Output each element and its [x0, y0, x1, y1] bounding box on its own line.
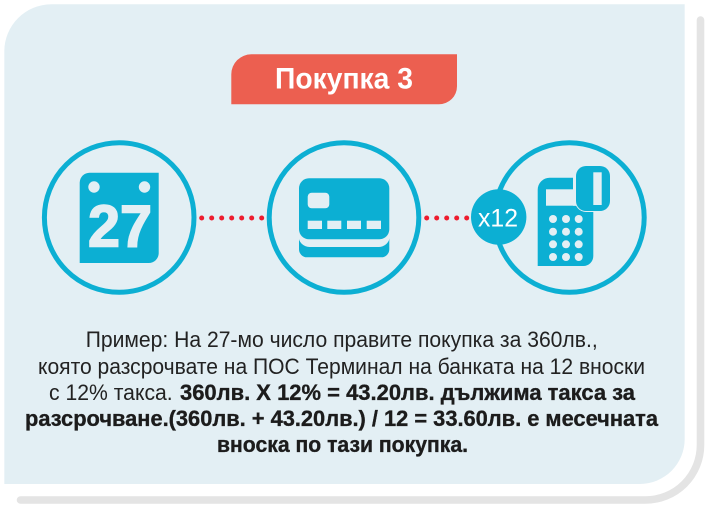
icon: POS terminal in circle — [495, 143, 644, 292]
text block: example explanation: 360лв. X 12% = 43.20лв. дължима такса за — [180, 380, 635, 405]
connector: dotted line card to terminal — [424, 216, 469, 220]
text block: example explanation — [25, 327, 658, 457]
text block: example explanation: Пример: На 27-мо число правите покупка за 360лв., — [86, 327, 598, 352]
icon: credit card in circle — [269, 143, 419, 292]
text block: example explanation: вноска по тази покупка. — [217, 432, 468, 457]
text block: example explanation: която разсрочвате на ПОС Терминал на банката на 12 вноски — [38, 354, 645, 379]
text block: example explanation: разсрочване.(360лв. + 43.20лв.) / 12 = 33.60лв. е месечната — [25, 406, 658, 431]
icon: calendar in circle: 27 — [88, 194, 152, 260]
badge: x12 installments: x12 — [478, 205, 518, 233]
badge: x12 installments — [471, 189, 526, 245]
icon: calendar in circle — [44, 143, 194, 292]
connector: dotted line calendar to card — [199, 216, 264, 220]
heading: Покупка 3 badge: Покупка 3 — [275, 63, 413, 96]
text block: example explanation: с 12% такса. — [49, 380, 173, 405]
heading: Покупка 3 badge — [231, 54, 457, 104]
